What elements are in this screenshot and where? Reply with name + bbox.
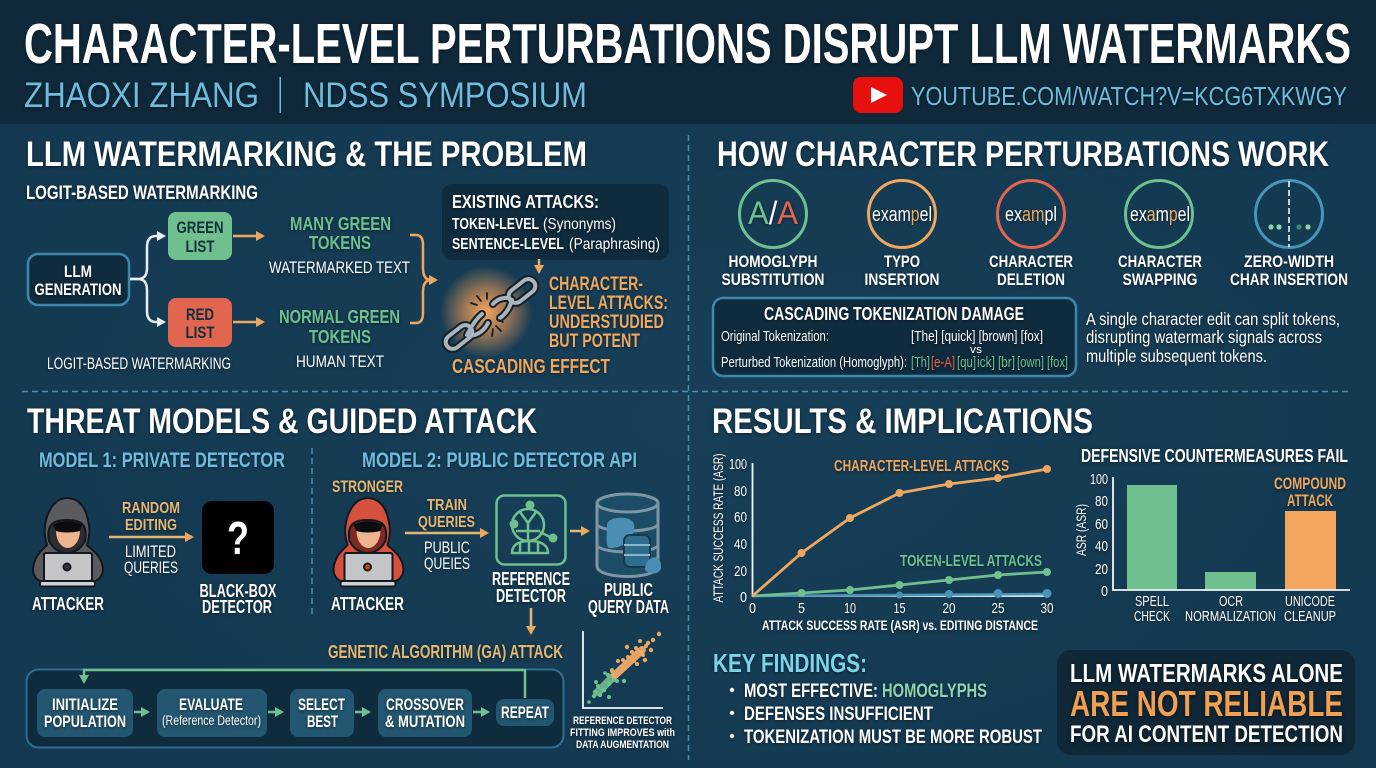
scatter caption: FITTING IMPROVES with <box>570 727 675 739</box>
icon: homoglyph substitution: SUBSTITUTION <box>722 270 824 289</box>
icon: character swapping: SWAPPING <box>1122 270 1198 289</box>
key findings: KEY FINDINGS: <box>713 648 867 678</box>
icon: zero-width char insertion: ZERO-WIDTH <box>1244 252 1334 271</box>
train queries label: TRAIN <box>427 497 467 514</box>
panel: results and implications <box>710 402 1355 755</box>
scatter caption: DATA AUGMENTATION <box>576 739 669 751</box>
y axis ticks: 80 <box>1095 493 1108 510</box>
limited queries label <box>124 542 178 577</box>
y axis ticks: 20 <box>1095 561 1108 578</box>
existing attacks box <box>442 184 669 260</box>
cascading tokenization damage box: [br] <box>998 355 1015 371</box>
x axis ticks: 20 <box>942 600 956 617</box>
human output: HUMAN TEXT <box>296 352 384 371</box>
step: initialize population: INITIALIZE <box>52 695 118 714</box>
arrow: green list to tokens <box>233 235 263 237</box>
compound attack label: ATTACK <box>1287 492 1333 510</box>
x axis ticks: 25 <box>992 600 1004 617</box>
icon: character deletion: CHARACTER <box>989 252 1073 271</box>
x axis ticks: 10 <box>844 600 856 617</box>
icon: public query database <box>588 494 669 617</box>
series: token-level <box>752 568 1051 597</box>
LLM generation box: LLM <box>64 262 92 281</box>
y axis ticks <box>1090 471 1108 600</box>
cascading tokenization damage box: [qu] <box>957 355 976 371</box>
icon: zero-width char insertion: CHAR INSERTION <box>1230 270 1348 289</box>
bar labels: UNICODE <box>1285 593 1335 610</box>
icon: typo insertion: exampel <box>872 204 932 226</box>
icon: typo insertion: TYPO <box>884 252 920 271</box>
icon: attacker grey <box>33 498 103 586</box>
scatter caption <box>570 715 675 751</box>
bar labels: CHECK <box>1134 608 1170 625</box>
y axis ticks: 20 <box>734 563 747 580</box>
y axis ticks: 40 <box>734 536 747 553</box>
x axis ticks: 5 <box>798 600 805 617</box>
explanation text <box>1086 309 1340 366</box>
existing attacks box: TOKEN-LEVEL <box>452 216 539 233</box>
author and venue: ZHAOXI ZHANG <box>24 76 259 115</box>
cascading tokenization damage box: ick] <box>977 355 995 371</box>
panel: LLM watermarking and the problem <box>26 135 669 378</box>
icon: attacker red <box>334 498 404 586</box>
step: initialize population <box>37 689 133 737</box>
white arrow: to green list <box>130 236 164 279</box>
step arrow 2 <box>268 711 282 713</box>
cascading tokenization damage box: [own] <box>1017 355 1044 371</box>
bullets: DEFENSES INSUFFICIENT <box>744 703 933 725</box>
existing attacks box: SENTENCE-LEVEL <box>452 236 564 253</box>
cascading tokenization damage box: [fox] <box>1047 355 1068 371</box>
icon: zero-width char insertion <box>1230 180 1348 289</box>
cascading tokenization damage box: [Th] <box>911 355 930 371</box>
limited queries label: QUERIES <box>124 558 178 577</box>
black-box detector: DETECTOR <box>202 597 272 617</box>
icon: public query database: PUBLIC <box>604 580 653 600</box>
public queies label <box>424 538 470 573</box>
icon: character deletion: DELETION <box>997 270 1065 289</box>
LLM generation box: GENERATION <box>34 280 122 299</box>
y axis ticks: 0 <box>740 589 747 606</box>
bar chart: defensive countermeasures <box>1073 445 1350 625</box>
bullets: MOST EFFECTIVE: <box>744 680 878 702</box>
bars <box>1127 485 1336 590</box>
line chart <box>710 454 1054 633</box>
stronger label: STRONGER <box>332 477 403 496</box>
conclusion callout <box>1057 650 1355 755</box>
icon: character swapping <box>1118 180 1202 289</box>
explanation text: multiple subsequent tokens. <box>1086 346 1267 366</box>
reference detector label <box>492 569 570 606</box>
series: baseline blue <box>752 589 1052 598</box>
existing attacks box: (Paraphrasing) <box>569 236 660 253</box>
black-box detector: ? <box>227 512 249 564</box>
bar labels: SPELL <box>1135 593 1169 610</box>
key findings <box>713 648 1042 748</box>
reference detector label: REFERENCE <box>492 569 570 589</box>
LLM generation box <box>28 254 129 305</box>
black-box detector <box>200 501 276 617</box>
watermarked output: MANY GREEN <box>290 214 391 234</box>
y axis ticks: 80 <box>734 483 747 500</box>
arrow: red list to tokens <box>233 321 263 323</box>
random editing label: RANDOM <box>122 500 180 517</box>
step: select best: SELECT <box>298 695 345 714</box>
icon: homoglyph substitution: A/A <box>748 195 799 231</box>
step: evaluate: EVALUATE <box>179 695 243 714</box>
green list box <box>168 212 232 260</box>
y axis ticks: 40 <box>1095 538 1108 555</box>
heading: LLM WATERMARKING & THE PROBLEM <box>26 135 587 174</box>
bullets <box>730 680 1042 748</box>
step arrow 3 <box>355 711 369 713</box>
character-level callout <box>549 274 668 352</box>
GA pipeline <box>26 670 564 748</box>
author and venue <box>24 76 587 115</box>
step: crossover and mutation: & MUTATION <box>385 712 465 731</box>
cascading tokenization damage box: CASCADING TOKENIZATION DAMAGE <box>764 304 1024 324</box>
series: character-level <box>752 465 1051 596</box>
x axis ticks: 0 <box>749 600 756 617</box>
human output: TOKENS <box>309 327 371 347</box>
x axis ticks <box>749 600 1054 617</box>
human output: NORMAL GREEN <box>279 307 400 327</box>
icon: typo insertion: INSERTION <box>864 270 940 289</box>
icon: youtube <box>853 77 903 113</box>
character-level callout: BUT POTENT <box>549 331 640 352</box>
arrow: down to GA attack <box>530 608 532 633</box>
y axis ticks: 0 <box>1101 583 1108 600</box>
watermarked output: WATERMARKED TEXT <box>269 258 410 277</box>
bar labels: CLEANUP <box>1284 608 1336 625</box>
step: repeat: REPEAT <box>501 703 549 722</box>
icon: character swapping: CHARACTER <box>1118 252 1202 271</box>
existing attacks box: EXISTING ATTACKS: <box>452 191 599 212</box>
step arrow 1 <box>134 711 148 713</box>
black-box detector: BLACK-BOX <box>200 581 276 601</box>
green list box: LIST <box>186 237 215 256</box>
step: evaluate <box>157 689 267 737</box>
compound attack label: COMPOUND <box>1274 475 1346 493</box>
character-level callout: UNDERSTUDIED <box>549 312 664 333</box>
arrow: bracket to chain <box>431 279 436 281</box>
character-level callout: LEVEL ATTACKS: <box>549 293 668 314</box>
panel: how character perturbations work <box>713 135 1348 376</box>
icon: character swapping: exampel <box>1130 204 1190 226</box>
model 2 heading: MODEL 2: PUBLIC DETECTOR API <box>362 449 637 472</box>
header band <box>0 0 1376 124</box>
x axis ticks: 15 <box>894 600 906 617</box>
cascading tokenization damage box: Original Tokenization: <box>721 329 829 345</box>
step: select best <box>290 689 354 737</box>
y axis title: ATTACK SUCCESS RATE (ASR) <box>710 454 726 602</box>
explanation text: disrupting watermark signals across <box>1086 327 1322 347</box>
bracket lines <box>410 235 431 323</box>
attacker label 2: ATTACKER <box>331 594 404 614</box>
step: repeat <box>496 699 554 726</box>
icon: character deletion: exampl <box>1005 204 1057 226</box>
step: evaluate: (Reference Detector) <box>162 712 261 728</box>
heading: RESULTS & IMPLICATIONS <box>712 402 1093 441</box>
limited queries label: LIMITED <box>125 542 176 561</box>
author and venue: NDSS SYMPOSIUM <box>303 76 587 115</box>
GA attack label: GENETIC ALGORITHM (GA) ATTACK <box>328 642 563 662</box>
watermarked output <box>269 214 410 277</box>
icon: homoglyph substitution: HOMOGLYPH <box>728 252 818 271</box>
arrow: attacker to reference detector <box>405 532 487 534</box>
cascading tokenization damage box: [e-A] <box>931 355 955 371</box>
character-level callout: CHARACTER- <box>549 274 643 295</box>
heading: THREAT MODELS & GUIDED ATTACK <box>27 402 537 441</box>
train queries label: QUERIES <box>418 514 475 531</box>
bar labels <box>1134 593 1336 625</box>
attacker label 1: ATTACKER <box>32 594 104 614</box>
caption: LOGIT-BASED WATERMARKING <box>47 354 231 373</box>
public queies label: QUEIES <box>424 554 470 573</box>
loop arrow <box>84 670 525 698</box>
step: select best: BEST <box>307 712 338 731</box>
subheading: LOGIT-BASED WATERMARKING <box>26 183 258 204</box>
random editing label: EDITING <box>125 517 177 534</box>
red list box: LIST <box>186 323 215 342</box>
scatter plot <box>583 631 663 708</box>
x axis title: ATTACK SUCCESS RATE (ASR) vs. EDITING DISTANCE <box>762 617 1038 633</box>
bar labels: NORMALIZATION <box>1185 608 1276 625</box>
green list box: GREEN <box>176 218 224 237</box>
cascading tokenization damage box: [The] [quick] [brown] [fox] <box>911 329 1043 345</box>
arrow: down to character-level <box>538 259 540 272</box>
cascading effect label: CASCADING EFFECT <box>452 356 610 378</box>
label: token-level attacks: TOKEN-LEVEL ATTACKS <box>900 553 1042 570</box>
step: crossover and mutation <box>378 689 472 737</box>
watermarked output: TOKENS <box>309 233 371 253</box>
public queies label: PUBLIC <box>424 538 470 557</box>
icon: typo insertion <box>864 180 940 289</box>
icon: public query database: QUERY DATA <box>588 597 669 617</box>
white arrow: to red list <box>130 279 164 322</box>
step: initialize population: POPULATION <box>44 712 126 731</box>
reference detector label: DETECTOR <box>496 586 566 606</box>
icon: character deletion <box>989 180 1073 289</box>
model 1 heading: MODEL 1: PRIVATE DETECTOR <box>39 449 285 472</box>
red list box: RED <box>186 305 214 324</box>
icon: broken chain <box>440 266 538 358</box>
step: crossover and mutation: CROSSOVER <box>386 695 464 714</box>
icon: homoglyph substitution <box>722 180 824 289</box>
icon: reference detector <box>496 496 566 564</box>
cascading tokenization damage box: vs <box>970 344 983 356</box>
y axis ticks: 60 <box>1095 516 1108 533</box>
x axis ticks: 30 <box>1040 600 1054 617</box>
arrow: attacker to black-box <box>109 536 192 538</box>
compound attack label <box>1274 475 1346 510</box>
bullets: TOKENIZATION MUST BE MORE ROBUST <box>744 726 1042 748</box>
step arrow 4 <box>473 711 488 713</box>
y axis ticks: 100 <box>1090 471 1108 488</box>
bullets: HOMOGLYPHS <box>882 680 987 702</box>
cascading tokenization damage box: Perturbed Tokenization (Homoglyph): <box>721 355 907 371</box>
y axis ticks: 60 <box>734 509 747 526</box>
label: character-level attacks: CHARACTER-LEVEL ATTACKS <box>834 458 1009 475</box>
bar labels: OCR <box>1219 593 1243 610</box>
random editing label <box>122 500 180 534</box>
y axis ticks <box>729 456 747 606</box>
y axis title: ASR (ASR) <box>1073 504 1089 556</box>
cascading tokenization damage box <box>713 298 1076 376</box>
human output <box>279 307 400 371</box>
scatter caption: REFERENCE DETECTOR <box>573 715 672 727</box>
train queries label <box>418 497 475 531</box>
red list box <box>168 298 232 347</box>
arrow: detector to data <box>570 530 588 532</box>
y axis ticks: 100 <box>729 456 747 473</box>
panel: threat models and guided attack <box>26 402 675 751</box>
existing attacks box: (Synonyms) <box>543 216 616 233</box>
